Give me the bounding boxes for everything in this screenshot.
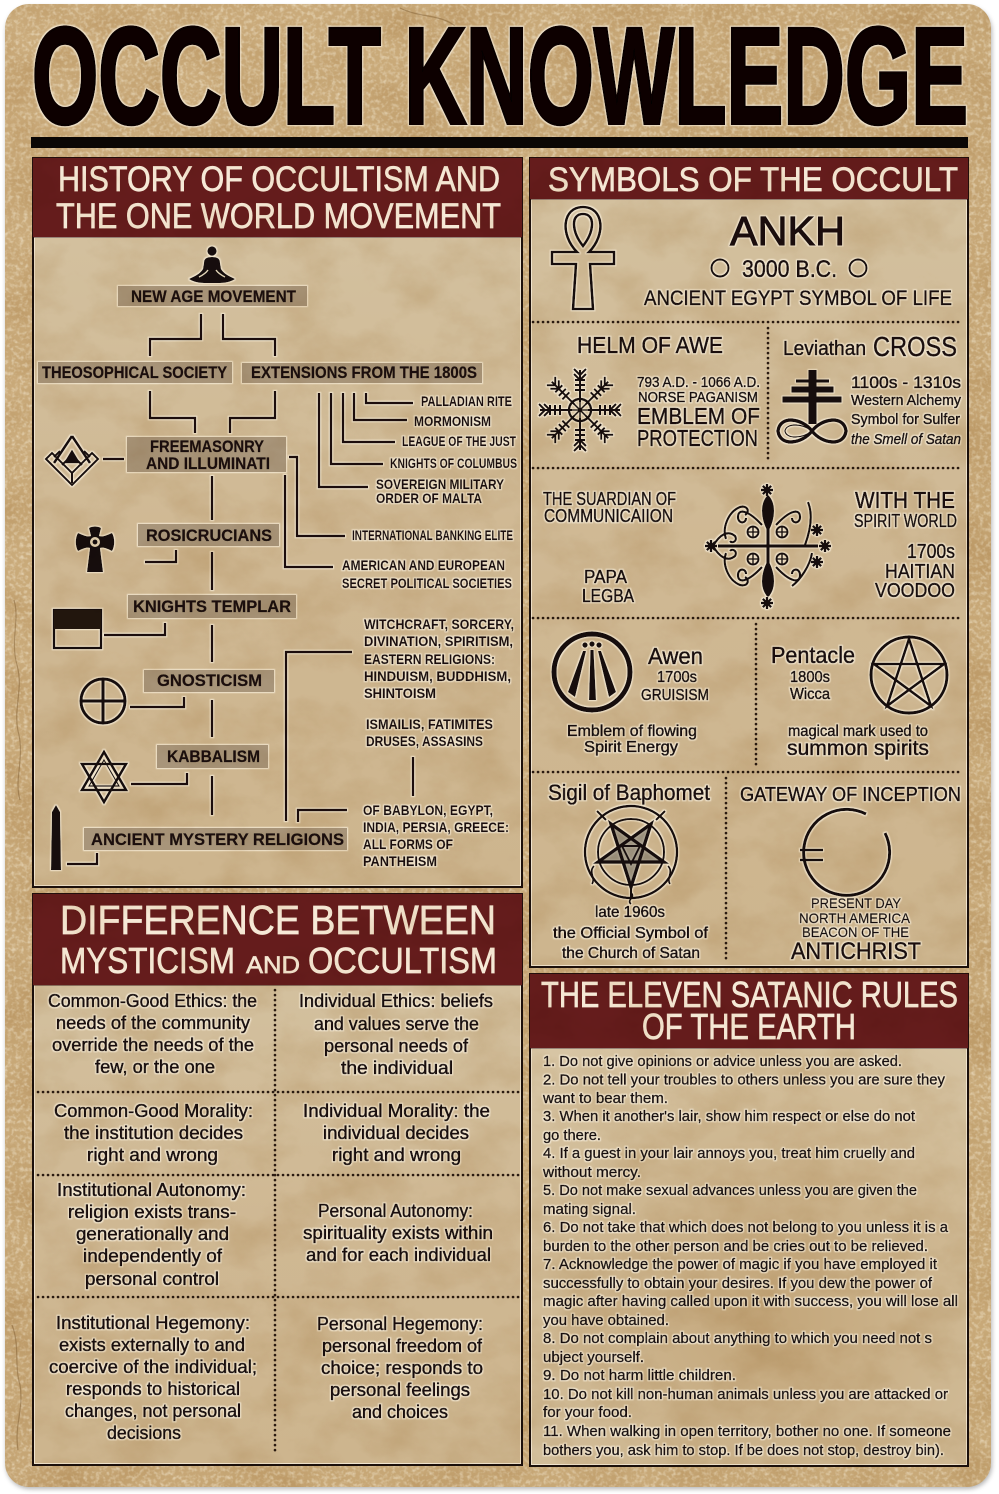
legba left text: COMMUNICAIION <box>544 506 673 526</box>
row 2 right: right and wrong <box>332 1145 461 1165</box>
row 4 left: changes, not personal <box>65 1401 241 1421</box>
sigil text <box>553 904 709 962</box>
heading: symbols: SYMBOLS OF THE OCCULT <box>548 161 958 199</box>
branch labels: SHINTOISM <box>364 685 436 701</box>
row 1 right: personal needs of <box>324 1036 469 1056</box>
rules list: 5. Do not make sexual advances unless you are given the <box>543 1182 917 1199</box>
symbol: awen <box>554 634 709 756</box>
heading: difference: AND <box>246 952 300 979</box>
legba right text <box>854 487 957 602</box>
row 2 left <box>54 1101 253 1165</box>
connector: templar <box>104 623 165 635</box>
symbol: helm of awe <box>539 332 760 451</box>
row 4 right: Personal Hegemony: <box>317 1314 483 1334</box>
extension labels <box>342 393 517 591</box>
extension labels: LEAGUE OF THE JUST <box>402 433 516 449</box>
connectors: new age to societies <box>150 314 275 433</box>
rules list: bothers you, ask him to stop. If be does not stop, destroy bin). <box>543 1442 944 1459</box>
extension labels: MORMONISM <box>414 413 491 429</box>
label: gnosticism: GNOSTICISM <box>157 671 262 690</box>
extension labels: ORDER OF MALTA <box>376 490 482 506</box>
rules list: 1. Do not give opinions or advice unless you are asked. <box>543 1053 902 1070</box>
heading: difference <box>33 894 522 985</box>
row 3 right: spirituality exists within <box>303 1223 493 1243</box>
ankh text: ANKH <box>730 208 845 254</box>
row 3 left <box>57 1180 246 1289</box>
pentacle text: summon spirits <box>787 737 929 760</box>
rules list: 6. Do not take that which does not belong to you unless it is a <box>543 1219 949 1236</box>
row 1 right: and values serve the <box>314 1014 479 1034</box>
row 4 right: personal freedom of <box>322 1336 483 1356</box>
pentacle text: Wicca <box>790 686 830 703</box>
rules list: magic after having called upon it with success, you will lose all <box>543 1293 958 1310</box>
label: ancient mystery religions: ANCIENT MYSTERY RELIGIONS <box>91 830 344 849</box>
legba left text: LEGBA <box>582 586 634 606</box>
helm text <box>637 374 760 451</box>
title rule <box>31 137 968 148</box>
row 4 left <box>49 1313 257 1443</box>
symbol: pentacle <box>771 637 947 760</box>
row 4 right: and choices <box>352 1402 448 1422</box>
awen text: 1700s <box>657 669 697 686</box>
label: rosicrucians: ROSICRUCIANS <box>146 526 272 545</box>
extension labels: SOVEREIGN MILITARY <box>376 476 505 492</box>
panel: difference between mysticism and occultism <box>33 894 522 1465</box>
helm text: PROTECTION <box>637 425 758 451</box>
row 4 left: exists externally to and <box>59 1335 245 1355</box>
rules list: 7. Acknowledge the power of magic if you have employed it <box>543 1256 938 1273</box>
helm text: 793 A.D. - 1066 A.D. <box>637 374 760 391</box>
row 2 left: the institution decides <box>64 1123 243 1143</box>
rules list: want to bear them. <box>542 1090 668 1107</box>
central spine <box>211 476 213 815</box>
row 3 left: independently of <box>83 1246 223 1266</box>
icon: awen <box>554 634 630 710</box>
connector: freemasonry to icon <box>103 458 124 460</box>
leviathan heading <box>783 331 957 362</box>
pentacle text: 1800s <box>790 669 830 686</box>
branch labels: DIVINATION, SPIRITISM, <box>364 633 513 649</box>
row 1 right: Individual Ethics: beliefs <box>299 991 493 1011</box>
branch labels: ISMAILIS, FATIMITES <box>366 716 493 732</box>
gateway text: NORTH AMERICA <box>799 910 911 926</box>
comparison table <box>48 991 493 1443</box>
rules list <box>542 1053 958 1459</box>
leviathan text <box>851 373 961 448</box>
icon: templar flag <box>54 610 101 648</box>
connectors: extensions <box>319 393 413 487</box>
heading: history: THE ONE WORLD MOVEMENT <box>56 197 501 236</box>
extension labels: AMERICAN AND EUROPEAN <box>342 557 505 573</box>
row 4 right <box>317 1314 483 1422</box>
gateway heading: GATEWAY OF INCEPTION <box>740 784 961 806</box>
icon: sigil of baphomet <box>585 806 677 904</box>
gateway text: BEACON OF THE <box>802 924 909 940</box>
row 1 left <box>48 991 257 1077</box>
rules list: 9. Do not harm little children. <box>543 1367 736 1384</box>
row 4 right: choice; responds to <box>321 1358 483 1378</box>
awen text: Spirit Energy <box>584 739 678 756</box>
symbol: papa legba <box>543 484 957 609</box>
legba right text: HAITIAN <box>885 561 955 583</box>
panel: symbols of the occult <box>530 158 968 967</box>
icon: sun cross <box>81 679 125 723</box>
pentacle text <box>771 642 929 760</box>
row 3 left: personal control <box>85 1269 219 1289</box>
row 3 left: generationally and <box>76 1224 229 1244</box>
icon: pentacle <box>871 637 947 713</box>
gateway text <box>791 895 921 965</box>
leviathan heading: Leviathan <box>783 338 866 360</box>
symbol: gateway of inception <box>740 784 961 965</box>
icon: obelisk <box>51 805 61 870</box>
rules list: successfully to obtain your desires. If you dew the power of <box>543 1275 933 1292</box>
branch labels: PANTHEISM <box>363 853 437 869</box>
heading: difference: MYSTICISM <box>60 940 235 981</box>
icon: star of david <box>82 752 126 802</box>
label: freemasonry and illuminati: FREEMASONRY <box>150 437 265 456</box>
legba right text: WITH THE <box>855 487 955 513</box>
pentacle text: magical mark used to <box>788 723 928 740</box>
label: theosophical society: THEOSOPHICAL SOCIETY <box>42 363 228 382</box>
heading: difference: OCCULTISM <box>308 940 497 981</box>
row 3 right: Personal Autonomy: <box>318 1201 473 1221</box>
leviathan heading: CROSS <box>873 331 957 362</box>
rules list: burden to the other person and be cries out to be relieved. <box>543 1238 928 1255</box>
rules list: 3. When it another's lair, show him respect or else do not <box>543 1108 916 1125</box>
icon: ankh <box>552 207 614 309</box>
ankh text <box>644 208 952 310</box>
heading: history: HISTORY OF OCCULTISM AND <box>58 160 500 199</box>
sigil text: late 1960s <box>595 904 665 921</box>
rules list: mating signal. <box>543 1201 636 1218</box>
sigil text: the Official Symbol of <box>553 925 709 942</box>
row 3 right: and for each individual <box>306 1245 491 1265</box>
pentacle text: Pentacle <box>771 642 855 668</box>
leviathan text: Symbol for Sulfer <box>851 411 960 428</box>
icon: meditating figure <box>189 246 235 283</box>
ankh text: 3000 B.C. <box>742 256 837 283</box>
flow chart <box>38 246 517 870</box>
awen text: GRUISISM <box>641 687 709 704</box>
rules list: 8. Do not complain about anything to which you need not s <box>543 1330 932 1347</box>
branch labels: EASTERN RELIGIONS: <box>364 651 495 667</box>
rules list: 10. Do not kill non-human animals unless you are attacked or <box>543 1386 948 1403</box>
row 3 right <box>303 1201 493 1265</box>
helm text: EMBLEM OF <box>637 403 760 429</box>
branch labels: HINDUISM, BUDDHISM, <box>364 668 511 684</box>
row 1 left: few, or the one <box>95 1057 215 1077</box>
awen text: Emblem of flowing <box>567 723 697 740</box>
legba right text: 1700s <box>907 541 955 563</box>
helm text: NORSE PAGANISM <box>638 389 758 406</box>
row 4 left: coercive of the individual; <box>49 1357 257 1377</box>
heading: rules <box>530 974 968 1048</box>
legba left text: THE SUARDIAN OF <box>543 489 676 509</box>
icon: square and compass <box>46 436 98 485</box>
row 3 left: Institutional Autonomy: <box>57 1180 246 1200</box>
row 1 left: Common-Good Ethics: the <box>48 991 257 1011</box>
connector: gnosticism <box>130 697 184 707</box>
rules list: 2. Do not tell your troubles to others unless you are sure they <box>543 1072 945 1088</box>
heading: difference: DIFFERENCE BETWEEN <box>60 897 496 943</box>
branch labels: INDIA, PERSIA, GREECE: <box>363 819 509 835</box>
symbol: sigil of baphomet <box>548 780 710 962</box>
row 2 right: Individual Morality: the <box>303 1101 490 1121</box>
rules list: for your food. <box>543 1404 632 1421</box>
label: kabbalism: KABBALISM <box>167 747 260 766</box>
label: freemasonry and illuminati <box>127 437 286 473</box>
icon: rosy cross <box>76 526 114 572</box>
panel: history of occultism <box>33 158 522 887</box>
legba left text: PAPA <box>584 567 627 587</box>
icon: helm of awe <box>539 369 621 451</box>
row 2 right: individual decides <box>323 1123 469 1143</box>
icon: leviathan cross <box>778 370 846 442</box>
branch labels: ALL FORMS OF <box>363 836 453 852</box>
legba right text: VOODOO <box>875 580 955 602</box>
leviathan text: Western Alchemy <box>851 392 961 409</box>
rules list: without mercy. <box>542 1164 641 1181</box>
legba left text <box>543 489 676 606</box>
gateway text: ANTICHRIST <box>791 938 921 965</box>
icon: gateway <box>800 809 890 895</box>
row 4 right: personal feelings <box>330 1380 470 1400</box>
row 2 right <box>303 1101 490 1165</box>
row 1 right: the individual <box>341 1058 453 1078</box>
connector: obelisk <box>67 853 97 864</box>
leviathan text: the Smell of Satan <box>851 431 961 448</box>
branch labels <box>363 616 514 869</box>
connector: kabbalism <box>131 773 187 784</box>
rules list: go there. <box>543 1127 601 1144</box>
sigil heading: Sigil of Baphomet <box>548 780 710 805</box>
branch labels: WITCHCRAFT, SORCERY, <box>364 616 514 632</box>
row 4 left: decisions <box>107 1423 181 1443</box>
panel: eleven satanic rules <box>530 974 968 1466</box>
rules list: ubject yourself. <box>543 1349 644 1366</box>
gateway text: PRESENT DAY <box>811 895 902 911</box>
rules list: 4. If a guest in your lair annoys you, treat him cruelly and <box>543 1145 915 1162</box>
row 2 left: right and wrong <box>87 1145 218 1165</box>
row 1 left: needs of the community <box>56 1013 250 1033</box>
icon: papa legba veve <box>705 484 831 609</box>
symbol dividers <box>533 322 960 960</box>
label: knights templar: KNIGHTS TEMPLAR <box>133 597 291 616</box>
connector: rosicrucians <box>145 550 176 562</box>
branch labels: DRUSES, ASSASINS <box>366 733 483 749</box>
connectors: freemasonry to elites <box>285 457 345 567</box>
symbol: leviathan cross <box>778 331 961 448</box>
label: freemasonry and illuminati: AND ILLUMINATI <box>146 454 270 473</box>
connectors: ancient mystery branches <box>286 652 413 822</box>
label: extensions from the 1800s: EXTENSIONS FROM THE 1800S <box>251 363 477 382</box>
awen text <box>567 643 709 756</box>
row 3 left: religion exists trans- <box>68 1202 236 1222</box>
ankh text: ANCIENT EGYPT SYMBOL OF LIFE <box>644 287 952 310</box>
row 1 right <box>299 991 493 1078</box>
table dividers <box>38 990 519 1452</box>
sigil text: the Church of Satan <box>562 945 700 962</box>
rules list: 11. When walking in open territory, bother no one. If someone <box>543 1423 951 1440</box>
extension labels: INTERNATIONAL BANKING ELITE <box>352 527 513 543</box>
extension labels: KNIGHTS OF COLUMBUS <box>390 455 517 471</box>
row 4 left: responds to historical <box>66 1379 240 1399</box>
awen text: Awen <box>648 643 703 669</box>
heading: history <box>33 158 522 237</box>
rules list: you have obtained. <box>543 1312 669 1329</box>
legba right text: SPIRIT WORLD <box>854 511 957 531</box>
label: new age movement: NEW AGE MOVEMENT <box>131 287 297 306</box>
row 1 left: override the needs of the <box>52 1035 254 1055</box>
branch labels: OF BABYLON, EGYPT, <box>363 802 493 818</box>
extension labels: SECRET POLITICAL SOCIETIES <box>342 575 512 591</box>
row 4 left: Institutional Hegemony: <box>56 1313 250 1333</box>
helm heading: HELM OF AWE <box>577 332 723 358</box>
heading: rules: OF THE EARTH <box>642 1006 856 1047</box>
row 2 left: Common-Good Morality: <box>54 1101 253 1121</box>
leviathan text: 1100s - 1310s <box>851 373 961 392</box>
extension labels: PALLADIAN RITE <box>421 393 512 409</box>
symbol: ankh <box>552 207 952 310</box>
